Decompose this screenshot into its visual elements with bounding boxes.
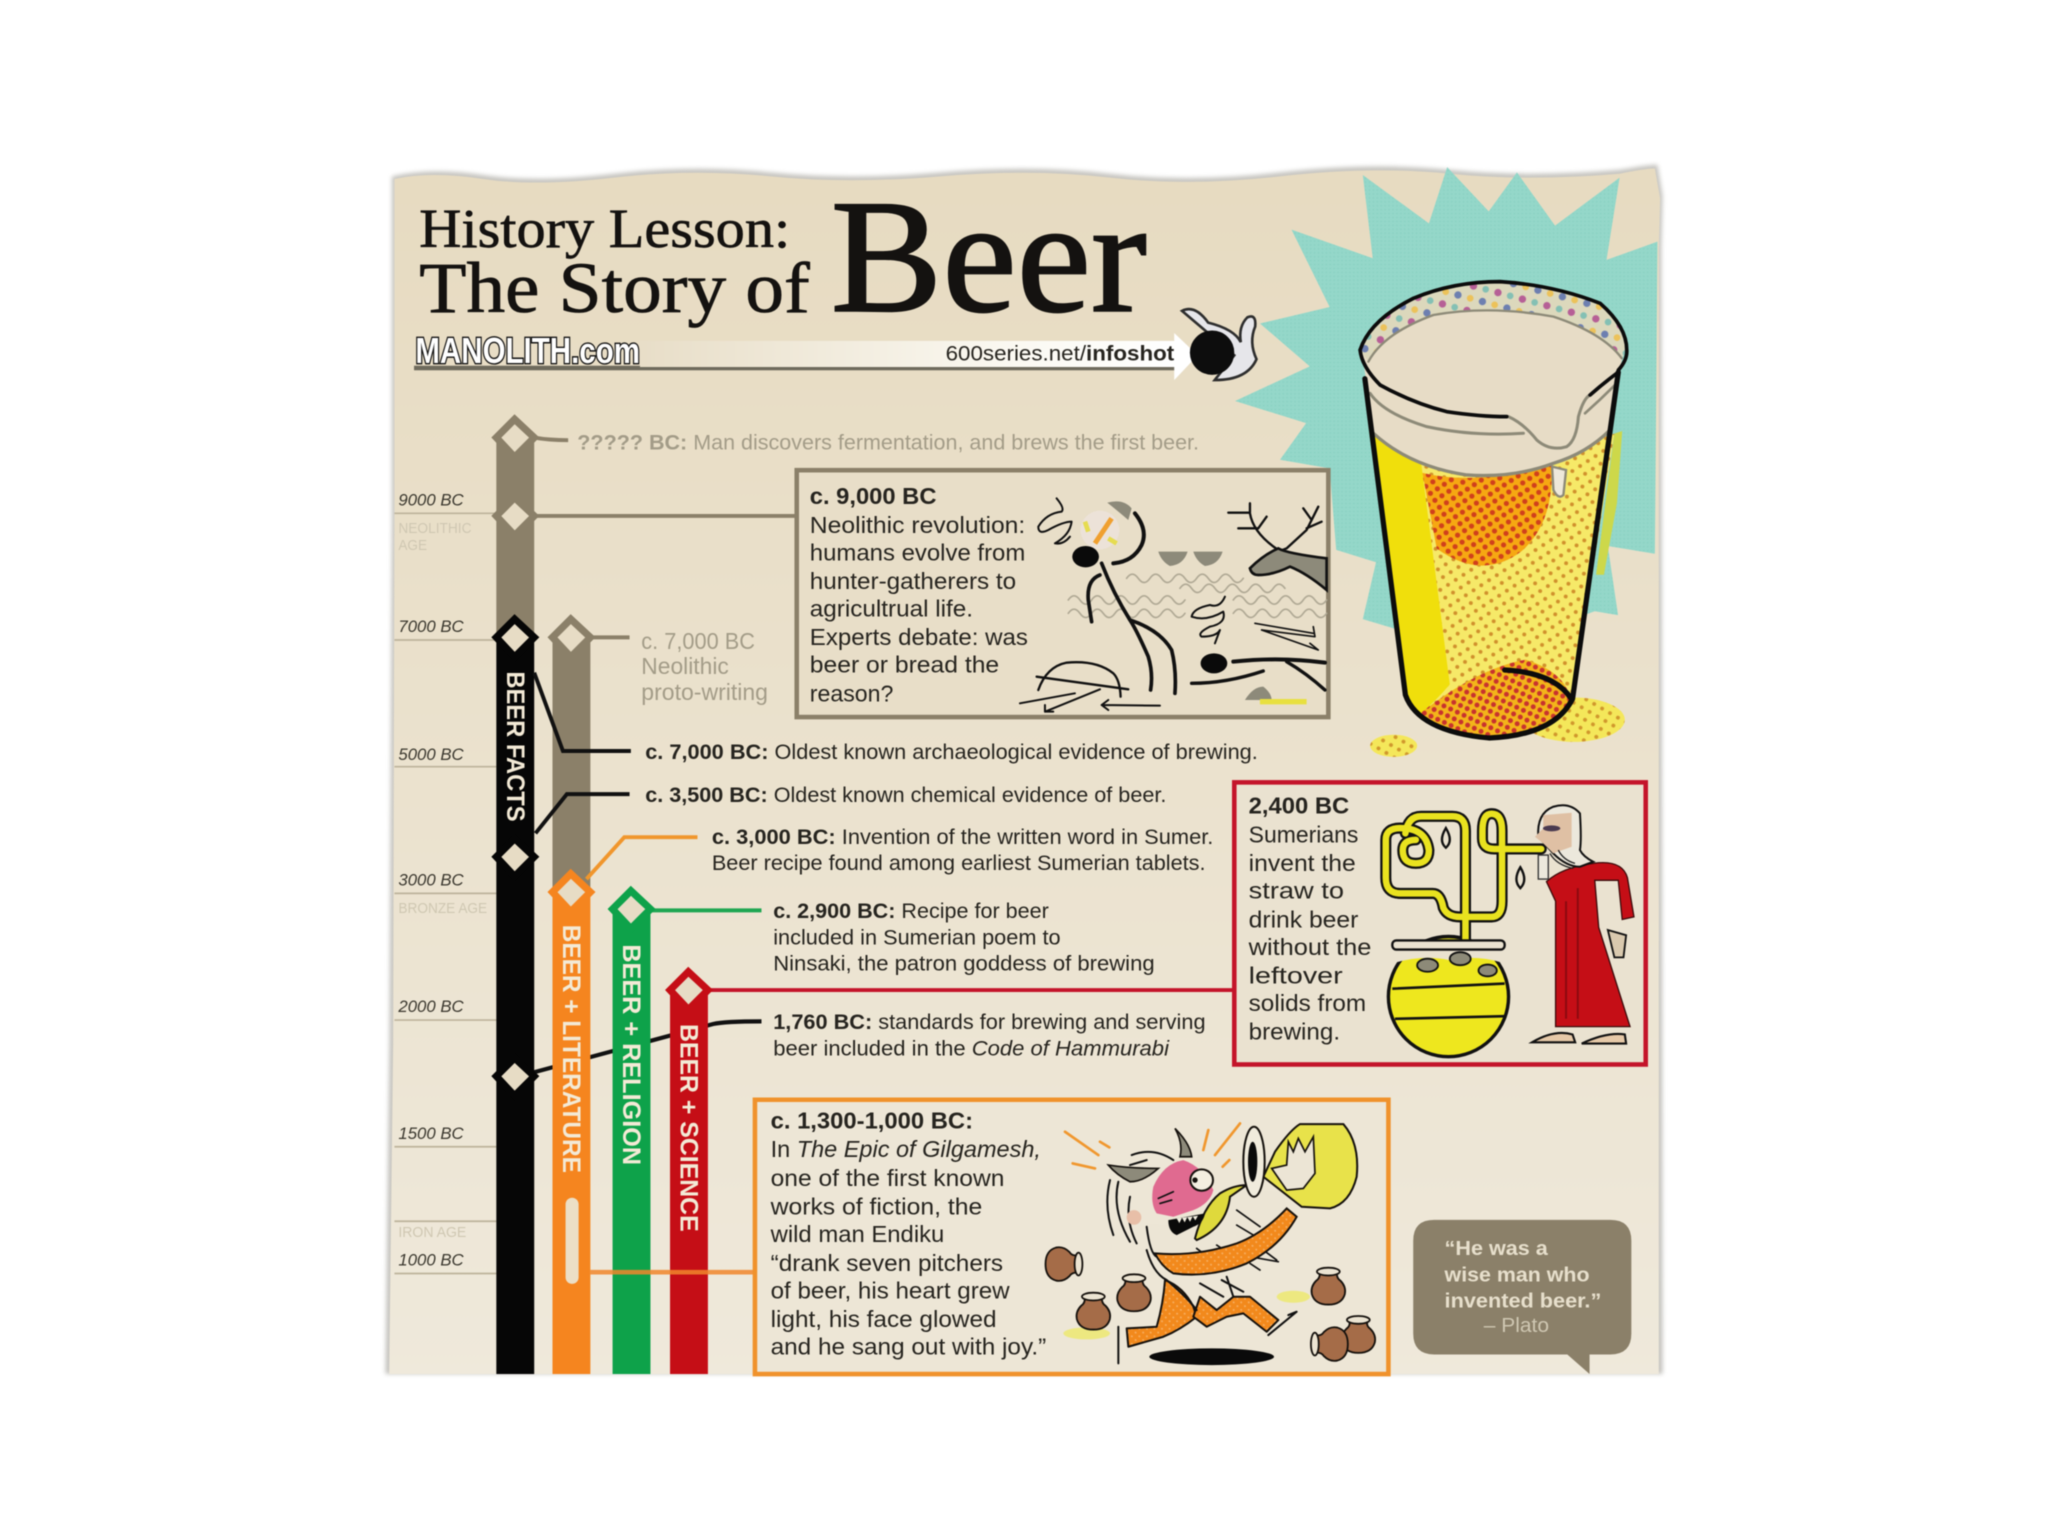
panel: c. 9,000 BC neolithic revolution <box>797 470 1328 717</box>
callout: Plato quote: “He was a <box>1445 1238 1549 1260</box>
title <box>419 168 1147 347</box>
illustration: Endiku drinking with jugs <box>1046 1123 1375 1365</box>
event: Code of Hammurabi <box>773 1011 1206 1060</box>
teal starburst <box>1235 167 1657 653</box>
timeline bar: beer and literature: BEER + LITERATURE <box>557 925 584 1173</box>
panel text: of beer, his heart grew <box>771 1277 1010 1303</box>
timeline year scale: 7000 BC <box>398 617 464 636</box>
timeline diamonds <box>496 419 708 1096</box>
rim band <box>1360 282 1627 362</box>
panel text: Experts debate: was <box>810 624 1028 650</box>
panel text: one of the first known <box>771 1165 1004 1191</box>
icon: bowling ball and pins <box>1182 309 1256 380</box>
scattered jugs <box>1046 1247 1375 1361</box>
event: proto-writing: c. 7,000 BC <box>641 628 755 654</box>
glass lip <box>1360 282 1627 417</box>
arrow tip <box>1174 333 1198 380</box>
timeline year scale: 1500 BC <box>398 1124 464 1143</box>
timeline year scale <box>394 490 496 1273</box>
panel text <box>770 1107 1046 1359</box>
event: poem to Ninsaki: Ninsaki, the patron goddess of brewing <box>773 952 1155 975</box>
timeline bar: beer and science <box>670 990 708 1374</box>
branding strip <box>414 330 1198 380</box>
event: written word: Beer recipe found among earliest Sumerian tablets. <box>712 852 1206 875</box>
foam <box>1362 283 1623 476</box>
panel text: brewing. <box>1249 1019 1340 1045</box>
panel text: wild man Endiku <box>770 1221 944 1247</box>
timeline bar: beer and literature <box>552 637 590 1374</box>
panel text: without the <box>1248 934 1371 960</box>
panel text: humans evolve from <box>810 539 1025 565</box>
event: chemical evidence: c. 3,500 BC: Oldest known chemical evidence of beer. <box>645 784 1166 807</box>
panel text: solids from <box>1249 990 1366 1016</box>
event: proto-writing: proto-writing <box>641 679 768 705</box>
timeline year scale: AGE <box>398 538 427 554</box>
panel text: drink beer <box>1249 906 1359 932</box>
event: poem to Ninsaki: included in Sumerian poem to <box>773 926 1061 949</box>
panel text: agricultrual life. <box>810 595 973 621</box>
panel text: reason? <box>810 680 893 706</box>
panel: 1,300-1,000 BC Gilgamesh <box>755 1100 1388 1374</box>
panel text: beer or bread the <box>810 652 999 678</box>
timeline year scale: 3000 BC <box>398 871 464 890</box>
event: Code of Hammurabi: 1,760 BC: standards for brewing and serving <box>773 1011 1206 1034</box>
beer fill <box>1369 428 1614 738</box>
yellow smudges <box>1063 1291 1310 1339</box>
timeline bar: beer facts <box>496 438 534 1374</box>
event: written word: c. 3,000 BC: Invention of the written word in Sumer. <box>712 826 1213 849</box>
panel text: Neolithic revolution: <box>810 512 1025 538</box>
panel: 2,400 BC straw <box>1234 782 1646 1064</box>
panel text: works of fiction, the <box>770 1194 982 1220</box>
pitcher <box>1263 1124 1357 1208</box>
spilled beer puddles <box>1370 431 1625 757</box>
title line: History Lesson: History Lesson: <box>419 198 790 259</box>
panel text: and he sang out with joy.” <box>771 1333 1046 1359</box>
shadow <box>1149 1348 1274 1365</box>
timeline year scale: 5000 BC <box>398 745 464 764</box>
illustration: bearded man drinking <box>1532 805 1634 1044</box>
panel text: c. 1,300-1,000 BC: <box>771 1107 973 1133</box>
timeline year scale: 9000 BC <box>398 490 464 509</box>
panel text: “drank seven pitchers <box>771 1250 1003 1276</box>
title line: The Story of: The Story of <box>419 248 810 328</box>
timeline bar: beer and religion: BEER + RELIGION <box>617 944 644 1165</box>
timeline bar: beer and science: BEER + SCIENCE <box>674 1024 701 1232</box>
panel text <box>1248 793 1371 1045</box>
connector: 1,760 BC line behind bars <box>529 1021 761 1074</box>
timeline year scale: IRON AGE <box>398 1225 466 1241</box>
panel text: In The Epic of Gilgamesh, <box>771 1136 1041 1162</box>
panel text: light, his face glowed <box>771 1306 997 1332</box>
timeline bar: beer facts: BEER FACTS <box>501 671 528 822</box>
timeline year scale: NEOLITHIC <box>398 521 472 537</box>
url text: 600series.net/ infoshot <box>946 342 1174 365</box>
panel text: leftover <box>1249 963 1343 989</box>
event: poem to Ninsaki <box>773 900 1155 975</box>
tongue area and chest <box>1147 1190 1287 1257</box>
event: Code of Hammurabi: beer included in the Code of Hammurabi <box>773 1037 1170 1060</box>
timeline bar: beer and religion <box>613 909 650 1374</box>
glass of beer <box>1360 282 1627 757</box>
callout: Plato quote: invented beer.” <box>1445 1290 1601 1312</box>
hair and horns <box>1107 1152 1173 1257</box>
panel text: invent the <box>1249 850 1356 876</box>
event: proto-writing <box>641 628 768 705</box>
callout: Plato quote: wise man who <box>1444 1264 1590 1286</box>
panel text: 2,400 BC <box>1249 793 1349 819</box>
illustration: pot and straw <box>1386 814 1541 1057</box>
event: written word <box>712 826 1213 875</box>
timeline year scale: BRONZE AGE <box>398 901 487 917</box>
cave painting illustration <box>1020 498 1327 712</box>
glass rim and foam head <box>1360 282 1627 497</box>
glass outline <box>1365 372 1618 738</box>
panel text: Sumerians <box>1249 821 1358 847</box>
face <box>1152 1160 1213 1217</box>
logo: MANOLITH.com: MANOLITH.com <box>415 330 640 371</box>
motion marks <box>1065 1123 1240 1168</box>
paper background <box>385 165 1663 1374</box>
event: poem to Ninsaki: c. 2,900 BC: Recipe for beer <box>773 900 1049 923</box>
bib <box>1155 1208 1297 1275</box>
legs <box>1127 1280 1278 1347</box>
timeline year scale: 2000 BC <box>397 997 464 1016</box>
title word: Beer: Beer <box>831 168 1147 347</box>
panel text: c. 9,000 BC <box>810 483 936 509</box>
panel text: hunter-gatherers to <box>810 568 1016 594</box>
event: fermentation: ????? BC: Man discovers fermentation, and brews the first beer. <box>577 431 1199 454</box>
panel text: straw to <box>1249 878 1344 904</box>
event: archaeological evidence: c. 7,000 BC: Oldest known archaeological evidence of brewing. <box>645 741 1258 764</box>
timeline year scale: 1000 BC <box>398 1251 464 1270</box>
callout: Plato quote <box>1413 1220 1631 1374</box>
connector lines <box>534 438 1234 1272</box>
panel text <box>810 483 1028 706</box>
event: proto-writing: Neolithic <box>641 653 729 679</box>
callout: Plato quote: – Plato <box>1484 1315 1549 1337</box>
